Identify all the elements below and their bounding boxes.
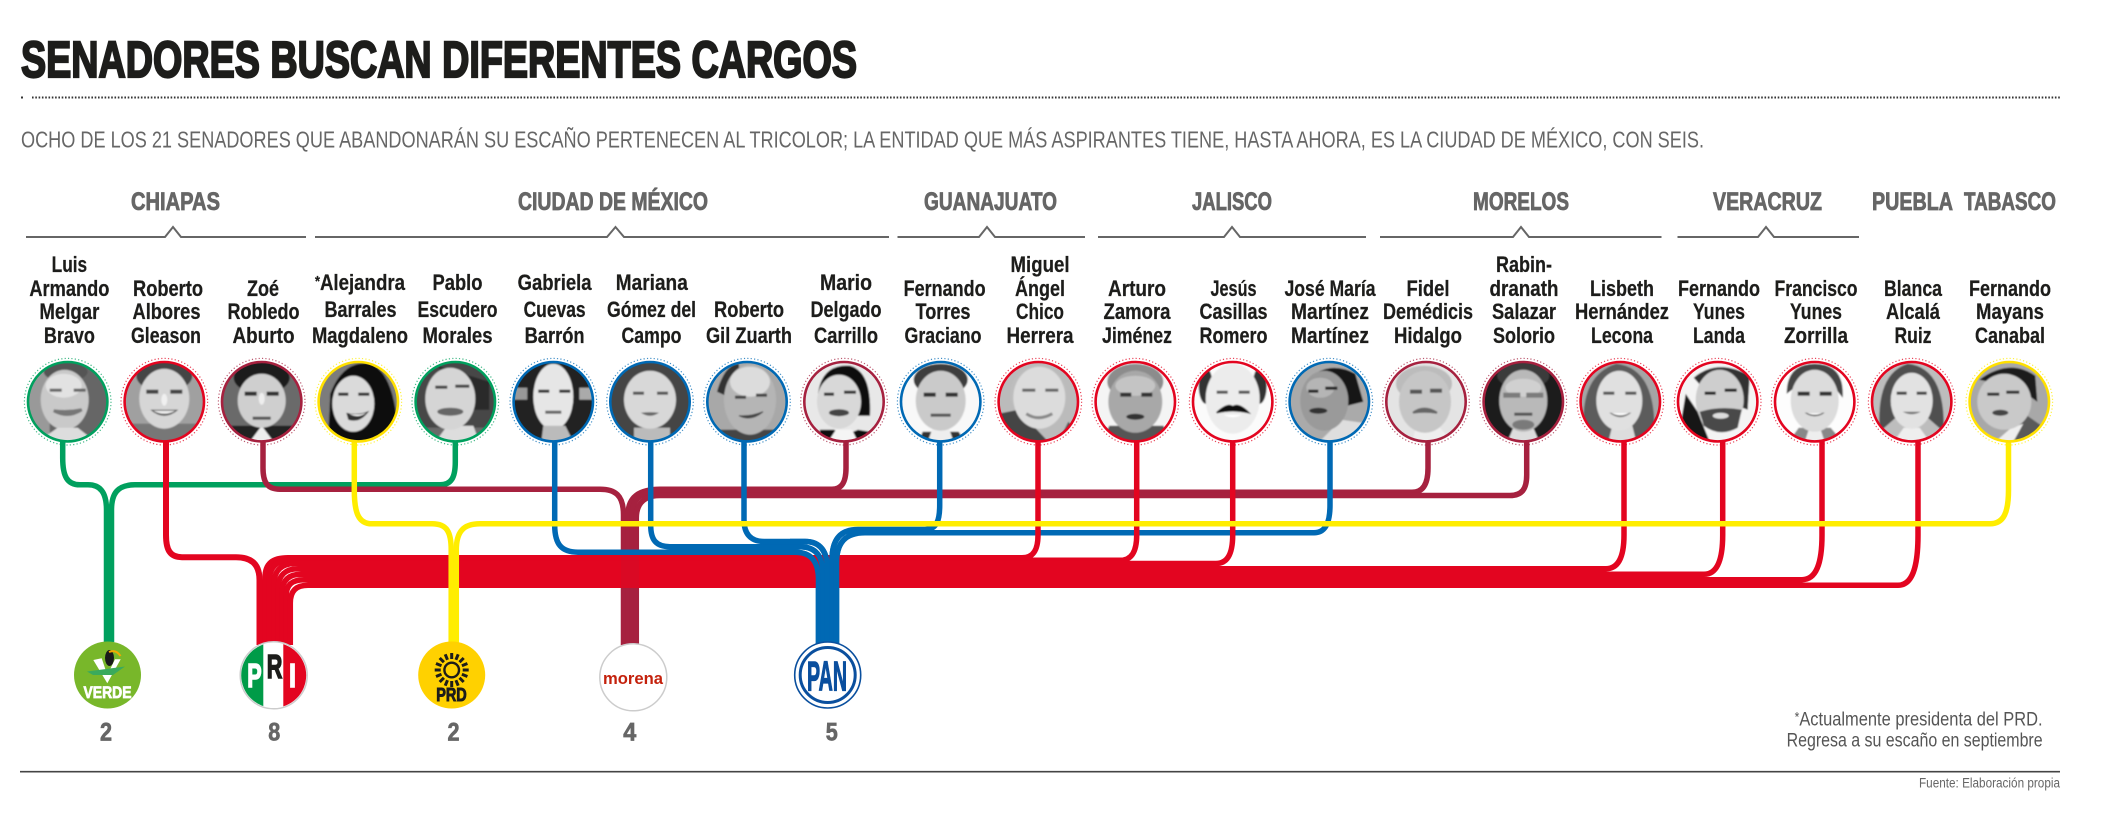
footnote	[1787, 709, 2043, 752]
name: Rabindranath Salazar Solorio: Rabin-	[1496, 252, 1552, 277]
portrait: Salazar	[1480, 358, 1567, 445]
name: Mario Delgado Carrillo: Carrillo	[814, 323, 878, 348]
name: Fidel Demédicis Hidalgo: Fidel	[1406, 276, 1450, 301]
portrait: Gómez del Campo	[607, 358, 693, 445]
state: Chiapas	[26, 188, 306, 237]
portrait: Barrales	[315, 358, 402, 445]
name: Zoé Robledo Aburto: Robledo	[228, 299, 300, 324]
logo: PRI: I	[289, 657, 296, 694]
name: Fernando Yunes Landa: Yunes	[1693, 299, 1745, 324]
name: Roberto Albores Gleason: Gleason	[131, 323, 201, 348]
logo: Morena	[600, 644, 667, 711]
name: Fernando Mayans Canabal: Fernando	[1969, 276, 2051, 301]
connectors: Verde	[63, 441, 455, 642]
name: Blanca Alcalá Ruiz: Ruiz	[1894, 323, 1932, 348]
subtitle: OCHO DE LOS 21 SENADORES QUE ABANDONARÁN SU ESCAÑO PERTENECEN AL TRICOLOR; LA ENTIDAD QUE MÁS ASPIRANTES TIENE, HASTA AHORA, ES LA CIUDAD DE MÉXICO, CON SEIS.	[21, 126, 1704, 152]
count: PRD: 2	[448, 719, 460, 747]
name: Miguel Ángel Chico Herrera: Herrera	[1006, 323, 1074, 348]
portrait: Yunes Zorrilla	[1771, 358, 1858, 445]
logo: PAN	[795, 642, 861, 708]
portrait: Yunes Landa	[1674, 358, 1761, 445]
name: Jesús Casillas Romero: Jesús	[1210, 276, 1256, 301]
name: Rabindranath Salazar Solorio	[1490, 252, 1558, 348]
name: Fernando Yunes Landa: Fernando	[1678, 276, 1760, 301]
name: Francisco Yunes Zorrilla	[1774, 276, 1858, 348]
state: Ciudad de México	[315, 187, 889, 237]
name: Gabriela Cuevas Barrón: Gabriela	[518, 270, 592, 295]
portrait: Cuevas	[510, 358, 597, 445]
footnote: *	[1795, 709, 1800, 725]
name: Fidel Demédicis Hidalgo	[1383, 276, 1473, 348]
logo: PAN: PAN	[807, 653, 847, 700]
name: Alejandra Barrales Magdaleno: *	[315, 273, 320, 290]
logo: PRI: R	[267, 648, 282, 685]
state: Guanajuato: GUANAJUATO	[924, 188, 1057, 216]
senator portraits	[24, 358, 2053, 445]
portrait: Delgado	[801, 358, 887, 445]
name: Mariana Gómez del Campo	[607, 270, 696, 348]
name: Jesús Casillas Romero	[1200, 276, 1268, 348]
portrait: Hernández	[1577, 358, 1664, 445]
count: PRI: 8	[268, 719, 280, 747]
name: Francisco Yunes Zorrilla: Francisco	[1774, 276, 1858, 301]
name: Alejandra Barrales Magdaleno: Magdaleno	[312, 323, 408, 348]
state: Guanajuato	[898, 188, 1085, 237]
state: Ciudad de México: CIUDAD DE MÉXICO	[518, 187, 708, 216]
portrait: Zamora	[1092, 358, 1179, 445]
count: Morena: 4	[623, 719, 636, 747]
name: Jesús Casillas Romero: Romero	[1200, 323, 1268, 348]
state: Veracruz: VERACRUZ	[1713, 188, 1822, 216]
state: Jalisco: JALISCO	[1192, 188, 1272, 216]
name: Zoé Robledo Aburto	[228, 276, 300, 348]
state: Morelos	[1380, 188, 1662, 237]
name: Blanca Alcalá Ruiz	[1884, 276, 1943, 348]
name: Francisco Yunes Zorrilla: Yunes	[1790, 299, 1842, 324]
name: Fidel Demédicis Hidalgo: Demédicis	[1383, 299, 1473, 324]
name: Mariana Gómez del Campo: Gómez del	[607, 297, 696, 322]
logo: PRD: PRD	[436, 685, 467, 705]
name: Luis Armando Melgar Bravo	[29, 252, 109, 348]
name: Fernando Mayans Canabal: Mayans	[1976, 299, 2044, 324]
name: Alejandra Barrales Magdaleno: Alejandra	[320, 270, 406, 295]
state: Tabasco: TABASCO	[1964, 188, 2056, 216]
name: Fidel Demédicis Hidalgo: Hidalgo	[1394, 323, 1462, 348]
state headings and brackets	[26, 187, 2056, 237]
portrait: Albores	[121, 358, 208, 445]
name: Roberto Albores Gleason: Roberto	[133, 276, 203, 301]
name: Zoé Robledo Aburto: Aburto	[232, 323, 294, 348]
portrait: Casillas	[1189, 358, 1276, 445]
count: PAN: 5	[826, 719, 838, 747]
name: Miguel Ángel Chico Herrera: Ángel	[1015, 276, 1065, 301]
name: Fernando Yunes Landa: Landa	[1693, 323, 1746, 348]
name: Pablo Escudero Morales: Pablo	[432, 270, 482, 295]
name: Francisco Yunes Zorrilla: Zorrilla	[1784, 323, 1849, 348]
portrait: Robledo	[218, 358, 305, 445]
name: Lisbeth Hernández Lecona: Lecona	[1591, 323, 1654, 348]
portrait: Demédicis	[1383, 358, 1469, 445]
source: Fuente: Elaboración propia	[1919, 776, 2060, 791]
name: José María Martínez Martínez: José María	[1284, 276, 1376, 301]
portrait: Mayans	[1966, 358, 2053, 445]
logo: PRI	[240, 640, 310, 710]
name: Luis Armando Melgar Bravo: Bravo	[44, 323, 95, 348]
name: Arturo Zamora Jiménez: Jiménez	[1102, 323, 1172, 348]
name: Fernando Torres Graciano: Graciano	[904, 323, 982, 348]
portrait: Martínez	[1286, 358, 1373, 445]
portrait: Torres	[897, 358, 984, 445]
name: Luis Armando Melgar Bravo: Luis	[52, 252, 87, 277]
name: Arturo Zamora Jiménez	[1102, 276, 1172, 348]
name: Fernando Torres Graciano: Torres	[916, 299, 970, 324]
name: Rabindranath Salazar Solorio: Salazar	[1492, 299, 1556, 324]
name: Roberto Gil Zuarth	[706, 297, 792, 348]
title: SENADORES BUSCAN DIFERENTES CARGOS	[21, 31, 857, 88]
name: Lisbeth Hernández Lecona: Hernández	[1575, 299, 1669, 324]
name: Luis Armando Melgar Bravo: Armando	[29, 276, 109, 301]
name: Roberto Albores Gleason	[131, 276, 203, 348]
name: José María Martínez Martínez	[1284, 276, 1376, 348]
name: Luis Armando Melgar Bravo: Melgar	[39, 299, 100, 324]
logo: Verde	[74, 642, 141, 708]
state: Veracruz	[1678, 188, 1859, 237]
portrait: Chico	[995, 358, 1082, 445]
name: Pablo Escudero Morales	[418, 270, 498, 348]
name: Blanca Alcalá Ruiz: Blanca	[1884, 276, 1943, 301]
connectors: PRI	[166, 441, 1918, 645]
name: Gabriela Cuevas Barrón: Cuevas	[524, 297, 586, 322]
name: Miguel Ángel Chico Herrera	[1006, 252, 1074, 348]
name: José María Martínez Martínez: Martínez	[1291, 299, 1369, 324]
name: Arturo Zamora Jiménez: Arturo	[1108, 276, 1166, 301]
party logos and counts	[74, 640, 861, 747]
count: Verde: 2	[100, 719, 112, 747]
name: Mario Delgado Carrillo: Mario	[820, 270, 872, 295]
name: Fernando Yunes Landa	[1678, 276, 1760, 348]
logo: PRD	[418, 642, 485, 708]
state: Morelos: MORELOS	[1473, 188, 1569, 216]
name: Pablo Escudero Morales: Escudero	[418, 297, 498, 322]
portrait: Escudero	[412, 358, 499, 445]
party connector lines	[63, 441, 2009, 645]
name: Mario Delgado Carrillo: Delgado	[810, 297, 882, 322]
state: Chiapas: CHIAPAS	[131, 188, 220, 216]
portrait: Gil Zuarth	[704, 358, 790, 445]
name: Mariana Gómez del Campo: Campo	[622, 323, 682, 348]
name: José María Martínez Martínez: Martínez	[1291, 323, 1369, 348]
name: Roberto Gil Zuarth: Gil Zuarth	[706, 323, 792, 348]
name: Gabriela Cuevas Barrón	[518, 270, 592, 348]
name: Fernando Torres Graciano	[904, 276, 986, 348]
name: Mariana Gómez del Campo: Mariana	[616, 270, 688, 295]
footnote: Actualmente presidenta del PRD.	[1799, 710, 2043, 731]
logo: Morena: morena	[603, 669, 664, 688]
state: Jalisco	[1098, 188, 1366, 237]
name: Lisbeth Hernández Lecona: Lisbeth	[1590, 276, 1654, 301]
footnote: Regresa a su escaño en septiembre	[1787, 731, 2043, 752]
name: Roberto Albores Gleason: Albores	[132, 299, 200, 324]
name: Alejandra Barrales Magdaleno	[312, 270, 408, 348]
name: Lisbeth Hernández Lecona	[1575, 276, 1669, 348]
portrait: Melgar	[24, 358, 111, 445]
name: Miguel Ángel Chico Herrera: Miguel	[1010, 252, 1070, 277]
logo: PRI: P	[247, 657, 262, 694]
state: Puebla: PUEBLA	[1872, 188, 1953, 216]
name: Jesús Casillas Romero: Casillas	[1200, 299, 1268, 324]
name: Alejandra Barrales Magdaleno: Barrales	[324, 297, 396, 322]
name: Fernando Mayans Canabal	[1969, 276, 2051, 348]
name: Zoé Robledo Aburto: Zoé	[247, 276, 279, 301]
connectors: PAN	[555, 441, 1330, 645]
name: Fernando Torres Graciano: Fernando	[904, 276, 986, 301]
name: Gabriela Cuevas Barrón: Barrón	[525, 323, 585, 348]
name: Roberto Gil Zuarth: Roberto	[714, 297, 784, 322]
senator names	[29, 252, 2051, 348]
portrait: Alcalá	[1868, 358, 1955, 445]
name: Rabindranath Salazar Solorio: dranath	[1490, 276, 1558, 301]
logo: Verde: VERDE	[84, 683, 132, 702]
name: Mario Delgado Carrillo	[810, 270, 882, 348]
connectors: PRD	[354, 441, 2008, 645]
name: Rabindranath Salazar Solorio: Solorio	[1493, 323, 1555, 348]
name: Fernando Mayans Canabal: Canabal	[1975, 323, 2045, 348]
name: Miguel Ángel Chico Herrera: Chico	[1016, 299, 1064, 324]
name: Arturo Zamora Jiménez: Zamora	[1104, 299, 1171, 324]
name: Blanca Alcalá Ruiz: Alcalá	[1886, 299, 1941, 324]
connectors: Morena	[263, 441, 1527, 645]
name: Pablo Escudero Morales: Morales	[422, 323, 492, 348]
